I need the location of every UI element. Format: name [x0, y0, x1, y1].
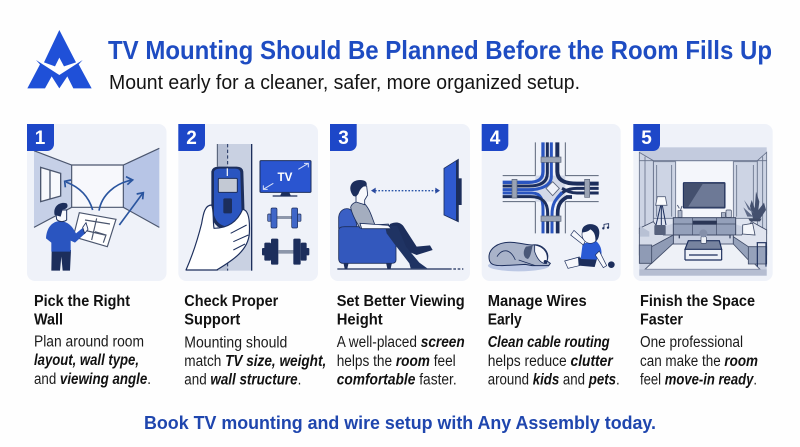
badge 3: 3 — [338, 128, 349, 149]
call to action: Book TV mounting and wire setup with Any Assembly today. — [144, 412, 656, 433]
heading 5: Finish the Space — [640, 293, 755, 310]
body 4: Clean cable routing — [488, 334, 610, 351]
badge 4: 4 — [490, 128, 501, 149]
illustration: planning the room — [34, 148, 159, 271]
logo: Any Assembly mountain A — [27, 30, 92, 88]
body 2 — [184, 334, 326, 388]
heading 2: Support — [184, 312, 240, 328]
illustration: finished living room — [639, 147, 767, 276]
body 1: layout, wall type, — [34, 352, 139, 369]
heading 4: Early — [488, 312, 522, 328]
heading 1: Pick the Right — [34, 293, 130, 310]
badge 5 — [633, 124, 660, 151]
body 5: can make the room — [640, 353, 758, 370]
badge 1 — [27, 124, 54, 151]
card 1 background — [27, 124, 166, 281]
badge 3 — [330, 124, 357, 151]
card 2 background — [178, 124, 318, 281]
illustration: stud finder and weight: TV — [278, 171, 293, 184]
illustration: cable routing, dog and child — [488, 142, 615, 271]
panel: step 4 manage wires early — [482, 124, 621, 388]
badge 4 — [482, 124, 508, 151]
body 5: feel move-in ready. — [640, 372, 757, 388]
badge 2 — [178, 124, 205, 151]
heading 3: Set Better Viewing — [337, 293, 465, 310]
panel: step 3 set better viewing height — [330, 124, 470, 388]
badge 2: 2 — [186, 128, 197, 149]
panel: step 2 check proper support — [178, 124, 326, 388]
badge 5: 5 — [641, 128, 652, 149]
heading 1: Wall — [34, 312, 63, 328]
subtitle: Mount early for a cleaner, safer, more organized setup. — [109, 72, 580, 94]
badge 1: 1 — [35, 128, 46, 149]
heading 4: Manage Wires — [488, 293, 587, 310]
body 5: One professional — [640, 334, 743, 351]
body 5 — [640, 334, 758, 388]
card 3 background — [330, 124, 470, 281]
body 2: match TV size, weight, — [184, 353, 326, 370]
panel: step 1 pick the right wall — [27, 124, 166, 388]
heading 3: Height — [337, 312, 383, 328]
heading 2: Check Proper — [184, 293, 278, 310]
panel: step 5 finish the space faster — [633, 124, 773, 388]
body 1: Plan around room — [34, 334, 144, 350]
body 3: helps the room feel — [337, 353, 456, 370]
card 4 background — [482, 124, 621, 281]
body 2: and wall structure. — [184, 372, 301, 388]
body 3: comfortable faster. — [337, 372, 457, 388]
body 2: Mounting should — [184, 334, 287, 352]
card 5 background — [633, 124, 773, 281]
body 4: around kids and pets. — [488, 372, 620, 388]
heading 5: Faster — [640, 312, 683, 328]
illustration: viewer and mounted TV — [337, 159, 463, 269]
body 1 — [34, 334, 151, 388]
body 3: A well-placed screen — [337, 334, 465, 351]
body 1: and viewing angle. — [34, 371, 151, 388]
illustration: stud finder and weight — [186, 144, 311, 271]
body 3 — [337, 334, 465, 388]
body 4 — [488, 334, 620, 388]
body 4: helps reduce clutter — [488, 353, 614, 370]
